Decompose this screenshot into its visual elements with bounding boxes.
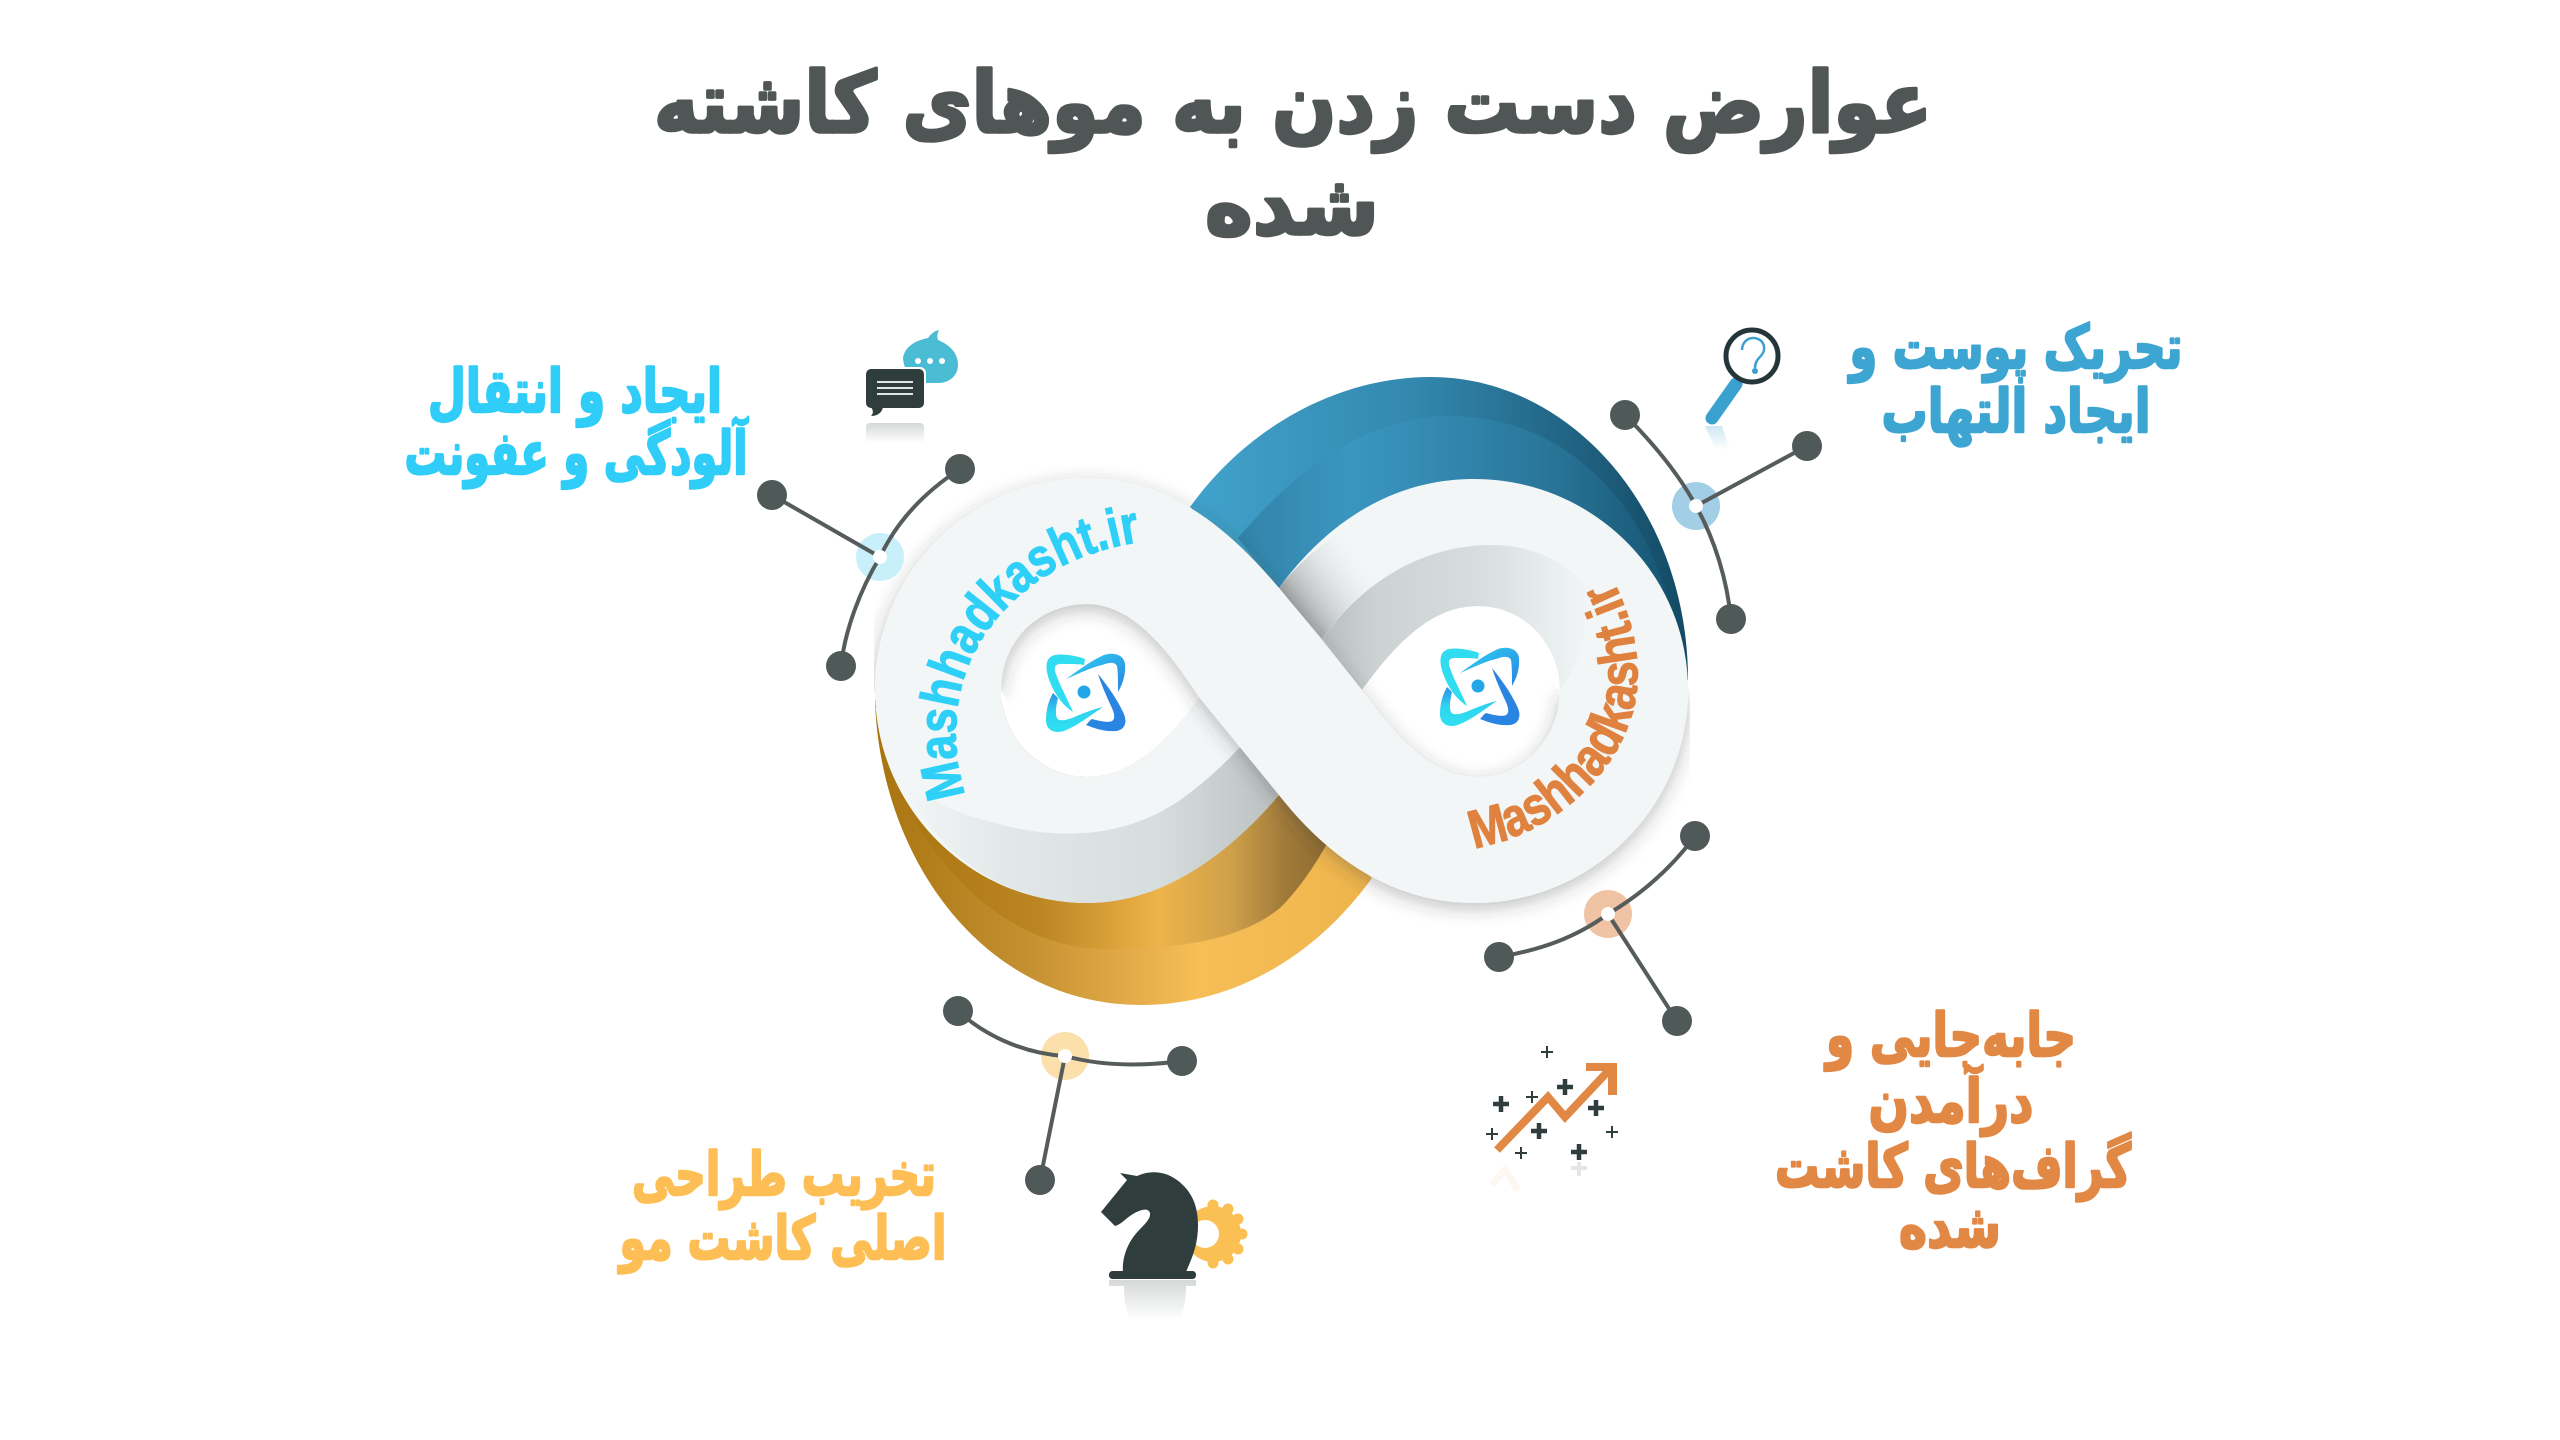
connector: orange xyxy=(1484,821,1710,1036)
label: graft displacement: شده xyxy=(1899,1192,2001,1262)
icon: magnifier xyxy=(1705,330,1778,450)
shadow fade beside the crossing xyxy=(1279,515,1410,639)
label: inflammation: ایجاد التهاب xyxy=(1882,377,2150,447)
curved brand text: left: Mashhadkasht.ir xyxy=(918,506,1137,802)
label: graft displacement: درآمدن xyxy=(1868,1064,2034,1137)
left hole xyxy=(1001,604,1199,777)
label: infection: ایجاد و انتقال xyxy=(428,357,722,427)
title xyxy=(654,54,1932,254)
logo: left xyxy=(1046,654,1125,732)
label: infection xyxy=(404,357,748,489)
label: infection: آلودگی و عفونت xyxy=(404,416,748,489)
icon: chess knight and gear xyxy=(1101,1172,1248,1320)
label: design damage: تخریب طراحی xyxy=(632,1140,936,1210)
seam cover: left lobe xyxy=(876,687,1001,693)
under ribbon of the loop xyxy=(875,479,1688,903)
label: inflammation: تحریک پوست و xyxy=(1847,313,2182,383)
connector: yellow xyxy=(943,996,1197,1195)
icon: chat bubbles xyxy=(864,330,958,443)
seam cover: right lobe xyxy=(1561,687,1687,693)
infinity diagram xyxy=(875,377,1688,1005)
label: graft displacement xyxy=(1775,1001,2131,1262)
blue back ribbon xyxy=(1190,377,1688,690)
connector: blue xyxy=(1610,400,1822,634)
title: شده xyxy=(1205,156,1379,254)
top ribbon shadow xyxy=(875,478,1688,903)
label: inflammation xyxy=(1847,313,2182,447)
logo: right xyxy=(1440,648,1519,726)
label: design damage: اصلی کاشت مو xyxy=(617,1204,946,1274)
knight xyxy=(1101,1172,1198,1272)
right hole xyxy=(1362,606,1560,777)
gear xyxy=(1185,1200,1248,1268)
gold back ribbon xyxy=(875,700,1372,1005)
shaded crescent: right lobe xyxy=(1322,545,1590,690)
connector: cyan xyxy=(757,454,975,681)
curved brand text: right: Mashhadkasht.ir xyxy=(1466,586,1638,849)
title: عوارض دست زدن به موهای کاشته xyxy=(654,54,1932,153)
icon: growth arrow xyxy=(1486,1046,1618,1190)
shaded crescent: left lobe xyxy=(905,742,1279,903)
label: graft displacement: گراف‌های کاشت xyxy=(1775,1132,2131,1202)
label: graft displacement: جابه‌جایی و xyxy=(1824,1001,2076,1071)
top ribbon of the loop xyxy=(875,478,1688,903)
label: design damage xyxy=(617,1140,946,1274)
